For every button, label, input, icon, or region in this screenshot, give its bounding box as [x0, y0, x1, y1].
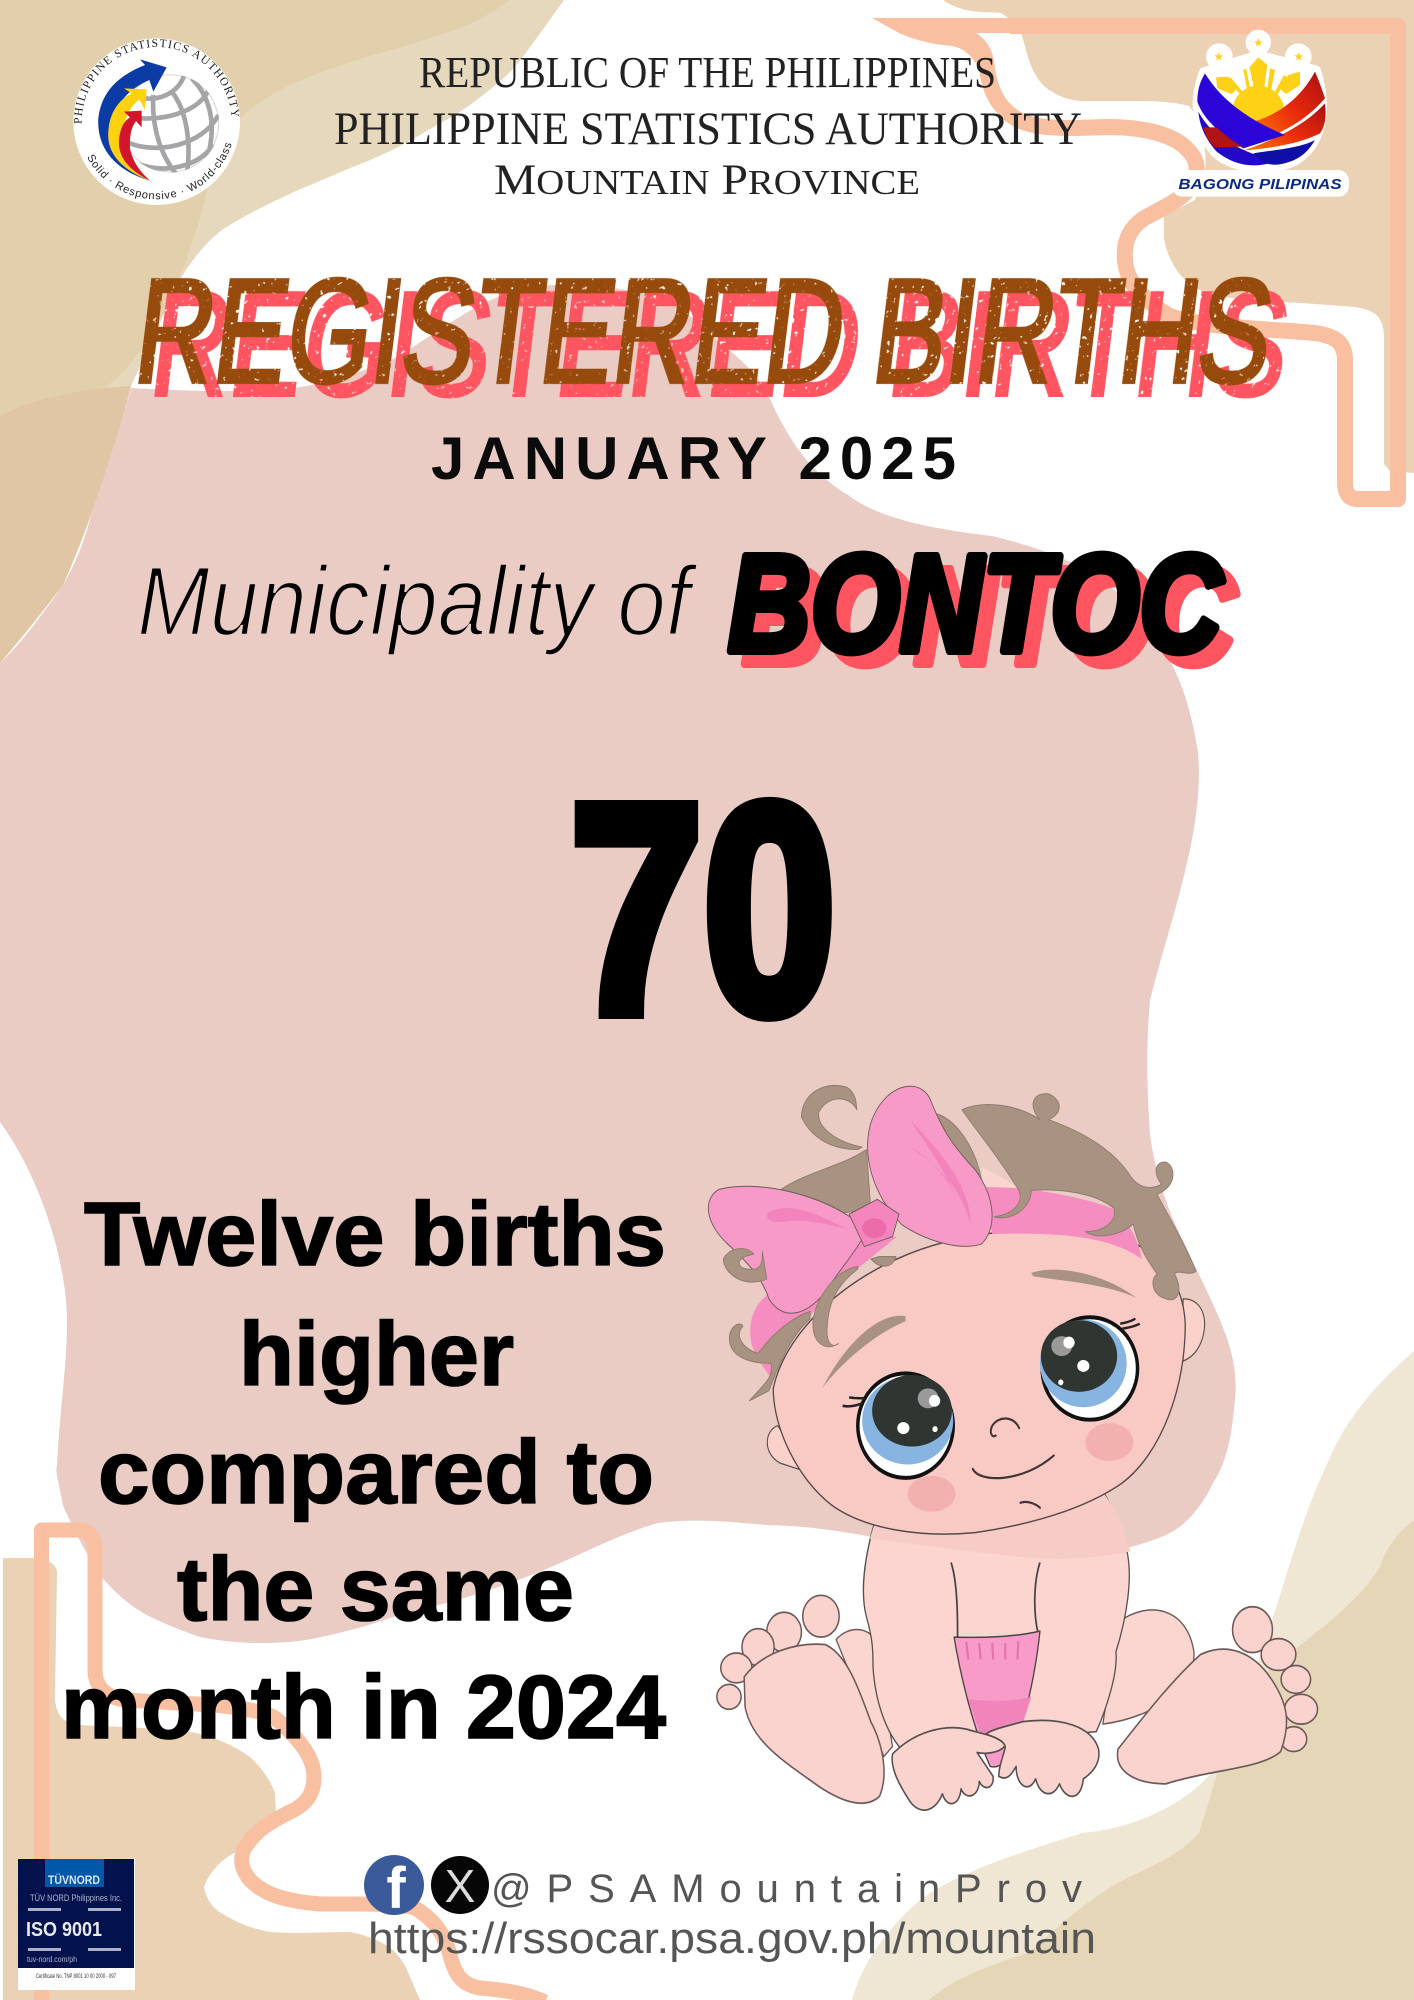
- certification badge: TUV Nord ISO 9001: ISO 9001: [26, 1919, 102, 1941]
- logo: Philippine Statistics Authority seal: [73, 38, 240, 205]
- logo: Bagong Pilipinas: [1172, 30, 1349, 197]
- header: agency line: PHILIPPINE STATISTICS AUTHORITY: [334, 103, 1082, 155]
- baby: right eye: [1040, 1317, 1140, 1420]
- comparison statement: compared to: [98, 1423, 654, 1523]
- illustration: baby girl: [708, 1085, 1318, 1810]
- baby: left hand: [892, 1728, 1005, 1810]
- comparison statement: month in 2024: [61, 1658, 666, 1758]
- baby: hair back: [780, 1085, 981, 1214]
- background: bottom-left tan shape: [3, 1558, 420, 2000]
- social handle: @PSAMountainProv: [491, 1867, 1082, 1911]
- logo: three stars: ★: [1214, 52, 1224, 64]
- decorative peach outline: bottom left: [42, 1530, 545, 2000]
- baby: cheeks: [908, 1423, 1133, 1512]
- background: top-right tan shape: [943, 0, 1414, 473]
- background: bottom-right darker shape: [929, 1520, 1414, 2000]
- logo: three stars: ★: [1253, 38, 1263, 50]
- baby: eyebrows: [822, 1270, 1136, 1388]
- baby: nose and mouth: [973, 1418, 1054, 1508]
- header: republic line: REPUBLIC OF THE PHILIPPINES: [419, 48, 996, 97]
- certification badge: TUV Nord ISO 9001: Certificate No. TNP 8001 10 00 2000 - 097: [36, 1974, 116, 1980]
- baby: back legs: [836, 1610, 1194, 1756]
- icon: X: X: [445, 1860, 475, 1912]
- certification badge: TUV Nord ISO 9001: TÜVNORD: [48, 1872, 100, 1887]
- icon: Facebook: f: [386, 1856, 406, 1921]
- baby: right hand: [986, 1720, 1099, 1796]
- logo: blue arrow: [98, 59, 167, 181]
- baby: bow ribbon: [708, 1086, 992, 1313]
- logo: red and orange band: [1253, 72, 1325, 142]
- icon: X: [431, 1856, 489, 1914]
- baby: hair top mass: [962, 1094, 1196, 1300]
- background: bottom-right light shape: [852, 1351, 1414, 2000]
- logo: sun with rays: [1216, 57, 1300, 138]
- comparison statement: Twelve births: [84, 1185, 666, 1285]
- logo: seal bottom text: Solid · Responsive · World-class: [88, 142, 232, 200]
- logo: yellow arrow: [108, 88, 150, 181]
- baby: torso under blob tint: [870, 1492, 1130, 1559]
- baby: headband: [750, 1187, 1142, 1378]
- logo: three stars: [1214, 38, 1304, 64]
- municipality name: Bontoc: BONTOC: [742, 540, 1238, 694]
- comparison statement: [61, 1185, 666, 1758]
- logo: white sticker outline: [1172, 30, 1349, 197]
- baby: ears: [767, 1299, 1205, 1473]
- baby: diaper: [954, 1631, 1040, 1767]
- certification badge: TUV Nord ISO 9001: [18, 1859, 135, 1990]
- comparison statement: the same: [177, 1540, 574, 1640]
- background: large pink blob: [0, 285, 1236, 1643]
- logo: Bagong Pilipinas wordmark: BAGONG PILIPINAS: [1178, 177, 1342, 193]
- logo: red arrow: [119, 111, 150, 181]
- website url: https://rssocar.psa.gov.ph/mountain: [368, 1914, 1096, 1963]
- logo: blue bands: [1197, 73, 1285, 148]
- logo: globe grid: [130, 74, 219, 173]
- big number: 70 births: 70: [570, 743, 836, 1076]
- certification badge: TUV Nord ISO 9001: TÜV NORD Philippines Inc.: [30, 1893, 122, 1903]
- background: top-left dark tan shape: [0, 0, 510, 416]
- background: lower-left tan shape: [0, 386, 131, 663]
- baby: front hair curls: [723, 1249, 896, 1401]
- baby: torso and arms: [863, 1490, 1130, 1749]
- baby: right foot: [1117, 1607, 1318, 1784]
- baby: pale patch under hair: [981, 1167, 1018, 1188]
- logo: seal top text: PHILIPPINE STATISTICS AUTHORITY: [74, 39, 240, 124]
- municipality name: Bontoc: BONTOC: [728, 527, 1224, 681]
- municipality label: Municipality of: [137, 546, 698, 656]
- decorative peach outline: top right: [872, 18, 1398, 499]
- certification badge: TUV Nord ISO 9001: tuv-nord.com/ph: [27, 1955, 77, 1964]
- icon: Facebook: [364, 1855, 424, 1921]
- comparison statement: higher: [239, 1305, 514, 1405]
- background: top-left light tan shape: [0, 0, 564, 663]
- baby: head: [773, 1229, 1185, 1534]
- baby: left eye: [843, 1373, 953, 1478]
- logo: three stars: ★: [1294, 52, 1304, 64]
- baby: left foot: [717, 1595, 884, 1803]
- date: january 2025: JANUARY 2025: [431, 425, 956, 492]
- header: province line: MOUNTAIN PROVINCE: [494, 157, 920, 204]
